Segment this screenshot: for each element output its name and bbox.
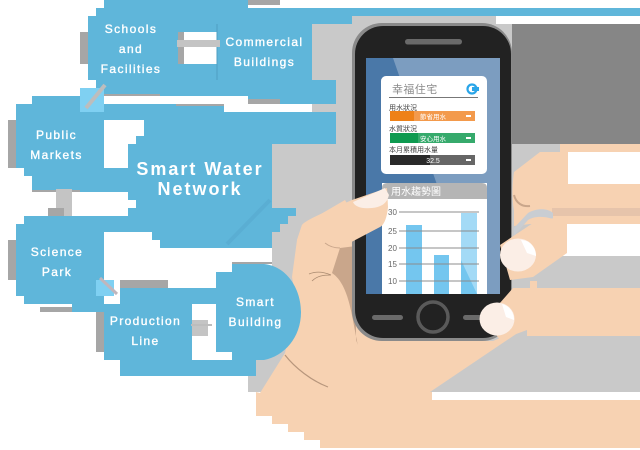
node label: Smart Building: Building bbox=[229, 315, 282, 329]
monthly usage status: 本月累積用水量 bbox=[389, 145, 438, 154]
water quality status: 水質狀況 bbox=[389, 124, 417, 133]
hand: palm and thumb base behind phone bbox=[256, 200, 640, 448]
node label: Public Markets bbox=[30, 128, 83, 162]
screen bbox=[366, 58, 500, 294]
connector: Smart Water Network to phone bbox=[227, 200, 270, 244]
finger: index bbox=[512, 144, 640, 256]
phone bbox=[352, 23, 512, 341]
connector: Production Line to Smart Building bbox=[191, 304, 216, 352]
status card bbox=[381, 76, 487, 174]
node label: Commercial Buildings: Commercial bbox=[225, 35, 304, 49]
water use status: 節省用水 bbox=[420, 112, 446, 121]
phone body bbox=[352, 23, 512, 341]
grid lines bbox=[399, 212, 479, 281]
node label: Production Line bbox=[110, 314, 181, 348]
node label: Science Park bbox=[31, 245, 83, 279]
node label: Smart Water Network: Smart Water bbox=[136, 159, 264, 179]
node label: Production Line: Production bbox=[110, 314, 181, 328]
node label: Schools and Facilities: Facilities bbox=[101, 62, 161, 76]
y axis labels bbox=[388, 208, 397, 286]
y axis labels: 30 bbox=[388, 208, 397, 217]
connector: Public Markets to Science Park bbox=[48, 189, 72, 216]
y axis labels: 20 bbox=[388, 244, 397, 253]
node label: Science Park: Park bbox=[42, 265, 72, 279]
node label: Public Markets: Public bbox=[36, 128, 77, 142]
y axis labels: 25 bbox=[388, 227, 397, 236]
home button bbox=[418, 302, 448, 332]
chart heading: 用水趨勢圖 bbox=[391, 185, 441, 198]
speaker bbox=[405, 39, 462, 44]
lower bars bbox=[372, 315, 490, 320]
node label: Schools and Facilities bbox=[101, 22, 161, 76]
connector: Schools to Commercial bbox=[177, 40, 220, 47]
node label: Smart Water Network bbox=[136, 159, 264, 199]
node label: Science Park: Science bbox=[31, 245, 83, 259]
node label: Smart Building: Smart bbox=[236, 295, 275, 309]
thumb bbox=[285, 188, 389, 387]
white gaps between nodes bbox=[72, 32, 217, 216]
water use status: 用水狀況 bbox=[389, 103, 417, 112]
node label: Commercial Buildings: Buildings bbox=[234, 55, 295, 69]
node label: Schools and Facilities: Schools bbox=[105, 22, 157, 36]
monthly usage status bbox=[389, 145, 475, 165]
connector: Science Park to Production Line bbox=[96, 278, 117, 296]
finger: ring bbox=[480, 281, 640, 340]
icon: logout bbox=[468, 84, 479, 94]
y axis labels: 15 bbox=[388, 260, 397, 269]
node label: Smart Building bbox=[229, 295, 282, 329]
water quality status: 安心用水 bbox=[420, 134, 446, 143]
connector: Schools to Public Markets bbox=[80, 85, 105, 112]
finger: middle bbox=[500, 218, 567, 280]
node label: Public Markets: Markets bbox=[30, 148, 83, 162]
gray edge strips bbox=[32, 24, 280, 192]
bars bbox=[406, 213, 477, 294]
water quality status bbox=[389, 124, 475, 143]
node label: Production Line: Line bbox=[131, 334, 160, 348]
node label: Commercial Buildings bbox=[225, 35, 304, 69]
hand shadow beside phone bbox=[332, 246, 358, 345]
water use status bbox=[389, 103, 475, 121]
usage trend chart card bbox=[382, 183, 487, 294]
y axis labels: 10 bbox=[388, 277, 397, 286]
node label: Smart Water Network: Network bbox=[157, 179, 243, 199]
node label: Schools and Facilities: and bbox=[119, 42, 143, 56]
card title: 幸福住宅 bbox=[392, 82, 438, 96]
monthly usage status: 32.5 bbox=[426, 158, 440, 165]
node: Smart Building circle bbox=[216, 264, 301, 360]
